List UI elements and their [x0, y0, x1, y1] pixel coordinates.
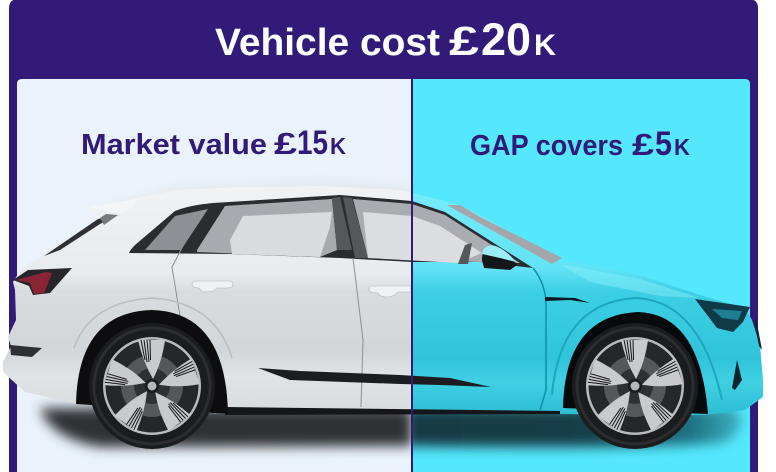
- rear lower vent: [10, 345, 42, 357]
- heading: market value: [81, 124, 346, 162]
- heading: GAP covers: [470, 125, 690, 163]
- wheel arch: front: [552, 298, 722, 414]
- roof halo: [149, 182, 409, 196]
- side windows: [129, 195, 533, 268]
- panel: GAP covers: [412, 79, 750, 472]
- car body: cyan half: [412, 185, 776, 417]
- heading: market value: K: [330, 133, 346, 159]
- headlight: [695, 299, 750, 332]
- heading: GAP covers: K: [674, 134, 690, 160]
- divider line: [411, 79, 413, 472]
- wheel arch: rear: [74, 298, 232, 414]
- heading: GAP covers: 5: [655, 125, 672, 163]
- rear window strip and spoiler: [44, 199, 138, 256]
- car: [0, 185, 776, 449]
- hood highlight: [560, 264, 700, 298]
- title: K: [534, 29, 556, 62]
- heading: market value: 15: [297, 124, 328, 162]
- title: £: [449, 18, 479, 64]
- taillight: [13, 268, 72, 295]
- door lines: [172, 246, 546, 410]
- front intake: [732, 360, 742, 390]
- heading: market value: Market value: [81, 129, 267, 161]
- front wheel: [572, 323, 698, 449]
- rear wheel: [89, 323, 215, 449]
- title: [215, 14, 556, 65]
- front grille edge: [754, 318, 762, 350]
- heading: GAP covers: GAP covers: [470, 130, 623, 162]
- windshield strip: [447, 205, 562, 264]
- sill strip: [225, 407, 560, 415]
- side vent: [545, 297, 590, 303]
- ground shadow: [40, 408, 742, 447]
- side body strip: [258, 368, 491, 387]
- wing mirror: [482, 245, 517, 270]
- heading: market value: £: [274, 126, 297, 161]
- title: Vehicle cost: [215, 22, 440, 64]
- heading: GAP covers: £: [632, 127, 654, 162]
- title: 20: [481, 14, 531, 65]
- car body: white half: [0, 185, 412, 417]
- panel: market value: [17, 79, 412, 472]
- door handles: [192, 281, 411, 297]
